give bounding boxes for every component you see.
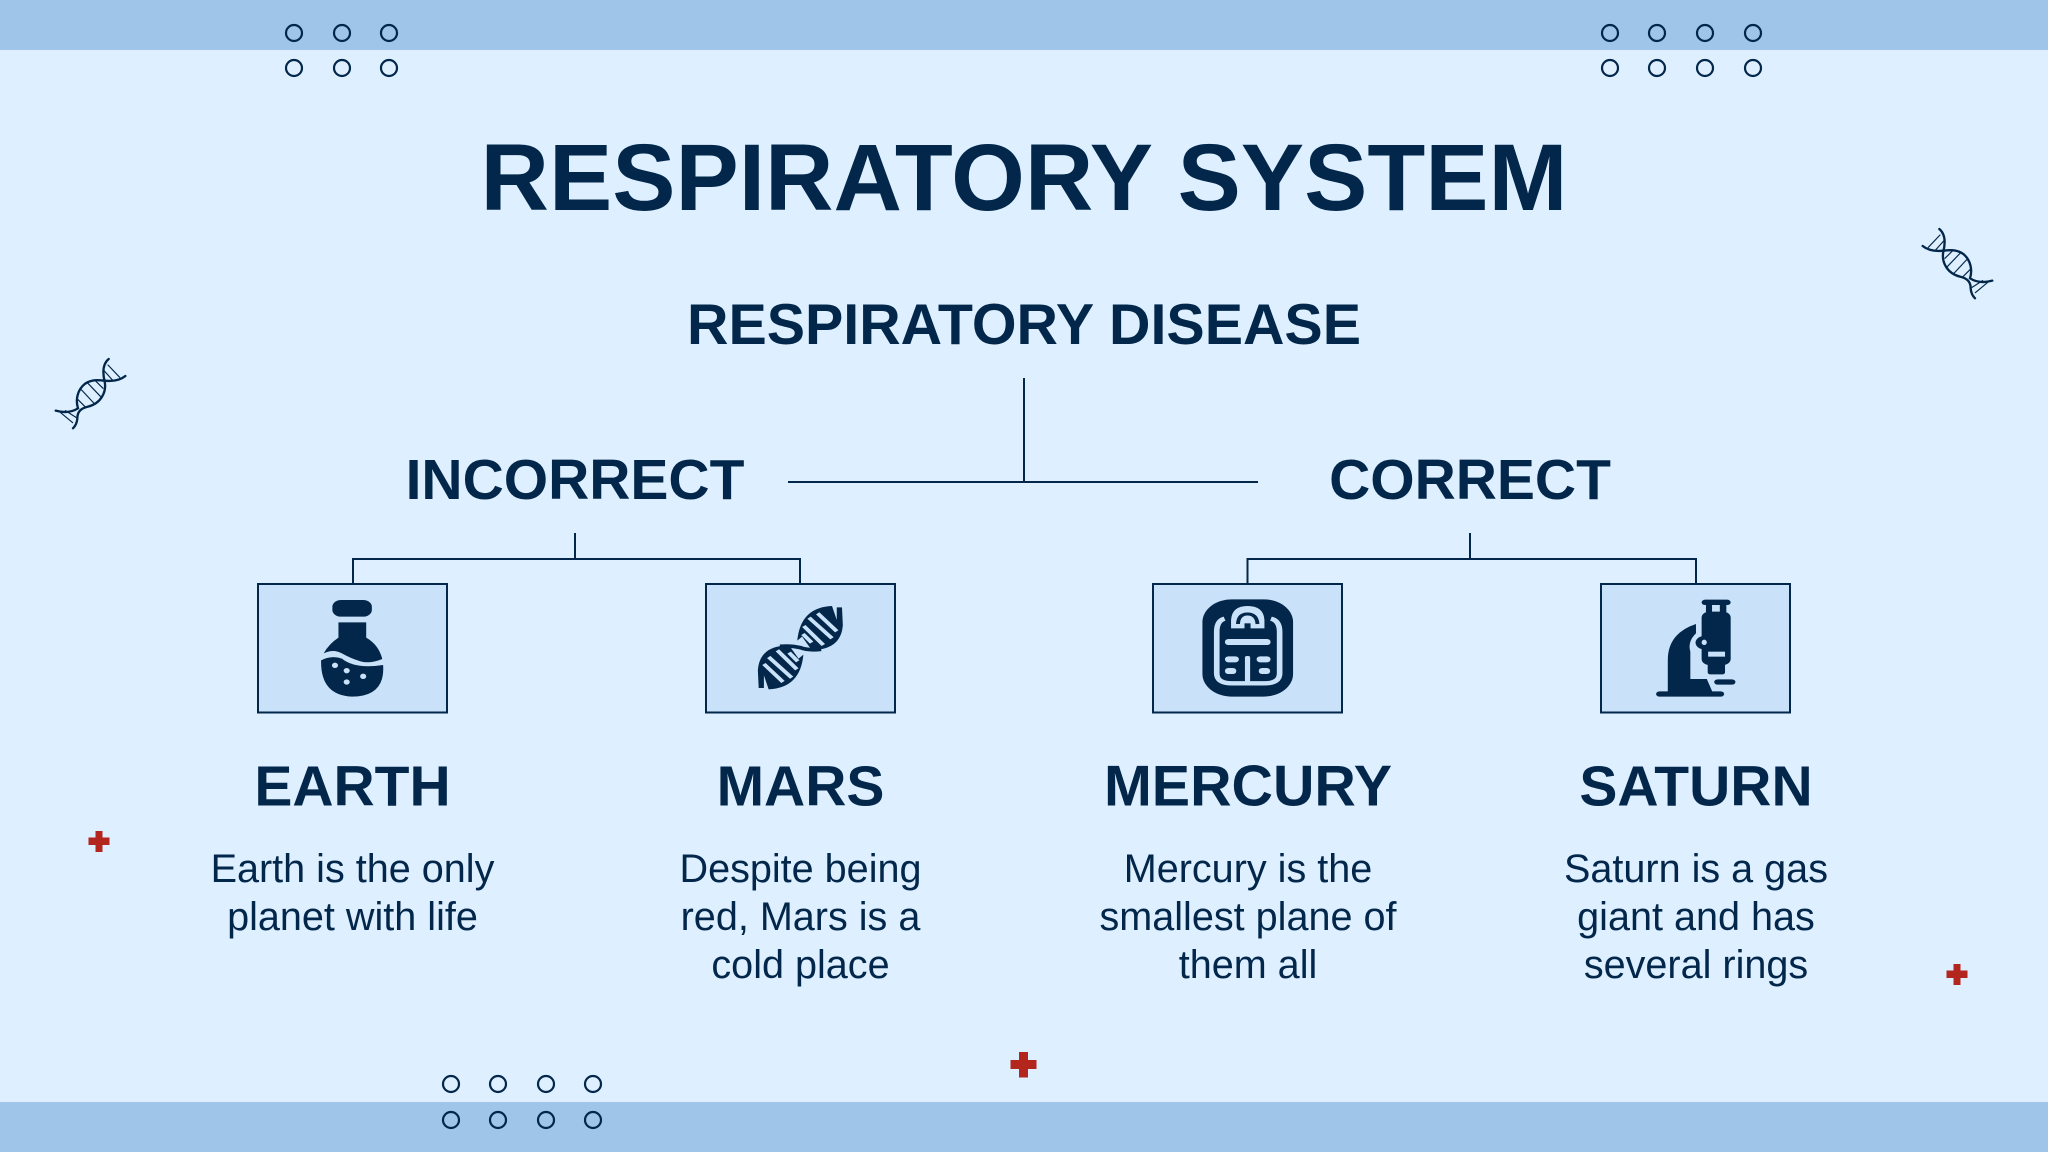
heading: respiratory disease: RESPIRATORY DISEASE <box>687 293 1361 357</box>
icon box: mercury <box>1153 584 1342 712</box>
label: saturn: SATURN <box>1579 754 1813 818</box>
heading: incorrect: INCORRECT <box>406 448 745 512</box>
description: saturn: several rings <box>1584 943 1808 987</box>
icon box: saturn <box>1601 584 1790 712</box>
icon: red cross right <box>1946 964 1968 985</box>
panel: earth <box>211 584 495 939</box>
icon: microscope <box>1656 600 1735 697</box>
description: earth: Earth is the only <box>211 847 495 891</box>
heading: correct: CORRECT <box>1329 448 1611 512</box>
description: mercury: smallest plane of <box>1100 895 1397 939</box>
icon: red cross bottom <box>1010 1052 1036 1078</box>
icon box: mars <box>706 584 895 712</box>
description: saturn: giant and has <box>1577 895 1815 939</box>
title: RESPIRATORY SYSTEM <box>481 125 1567 231</box>
description: saturn: Saturn is a gas <box>1564 847 1828 891</box>
panel: mars <box>679 584 922 987</box>
description: earth: planet with life <box>227 895 478 939</box>
dot grid: top left <box>286 25 397 76</box>
icon box: earth <box>258 584 447 712</box>
description: mercury: Mercury is the <box>1124 847 1372 891</box>
panel: saturn <box>1564 584 1828 987</box>
bottom band <box>0 1102 2048 1152</box>
connector: correct branches <box>1248 533 1696 584</box>
icon: flask <box>321 600 383 697</box>
icon: dna <box>758 606 843 689</box>
icon: scale <box>1202 599 1293 697</box>
connector: incorrect branches <box>353 533 800 584</box>
icon: red cross left <box>88 831 110 852</box>
label: earth: EARTH <box>254 754 451 818</box>
icon: small dna right <box>1923 229 1992 298</box>
label: mars: MARS <box>717 754 884 818</box>
label: mercury: MERCURY <box>1104 754 1392 818</box>
description: mars: cold place <box>711 943 890 987</box>
dot grid: top right <box>1602 25 1761 76</box>
panel: mercury <box>1100 584 1397 987</box>
connector: disease branches <box>788 378 1258 482</box>
description: mercury: them all <box>1179 943 1317 987</box>
description: mars: red, Mars is a <box>681 895 921 939</box>
description: mars: Despite being <box>679 847 922 891</box>
icon: small dna left <box>56 359 125 428</box>
dot grid: bottom <box>443 1076 601 1128</box>
top band <box>0 0 2048 50</box>
